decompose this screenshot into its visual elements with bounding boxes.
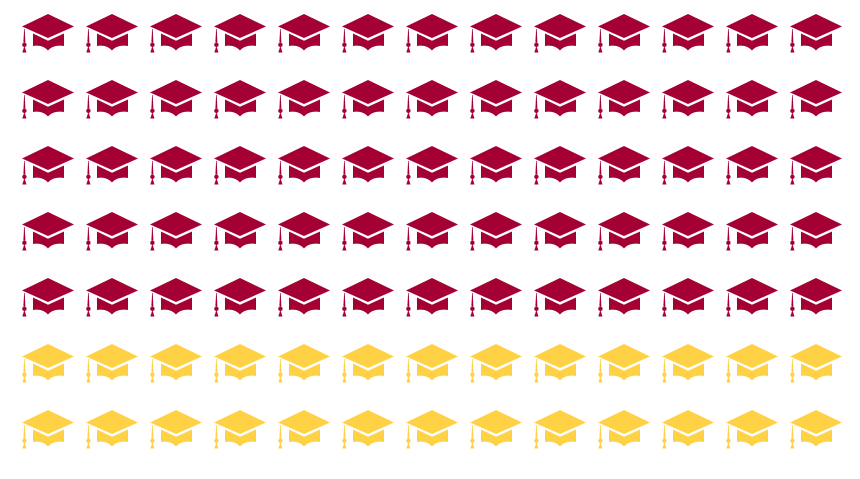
row 4: crimson caps [22,212,842,250]
row 3: crimson caps [22,146,842,184]
row 1: crimson caps [22,14,842,52]
row 2: crimson caps [22,80,842,118]
row 7: yellow caps [22,410,842,448]
row 6: yellow caps [22,344,842,382]
row 5: crimson caps [22,278,842,316]
